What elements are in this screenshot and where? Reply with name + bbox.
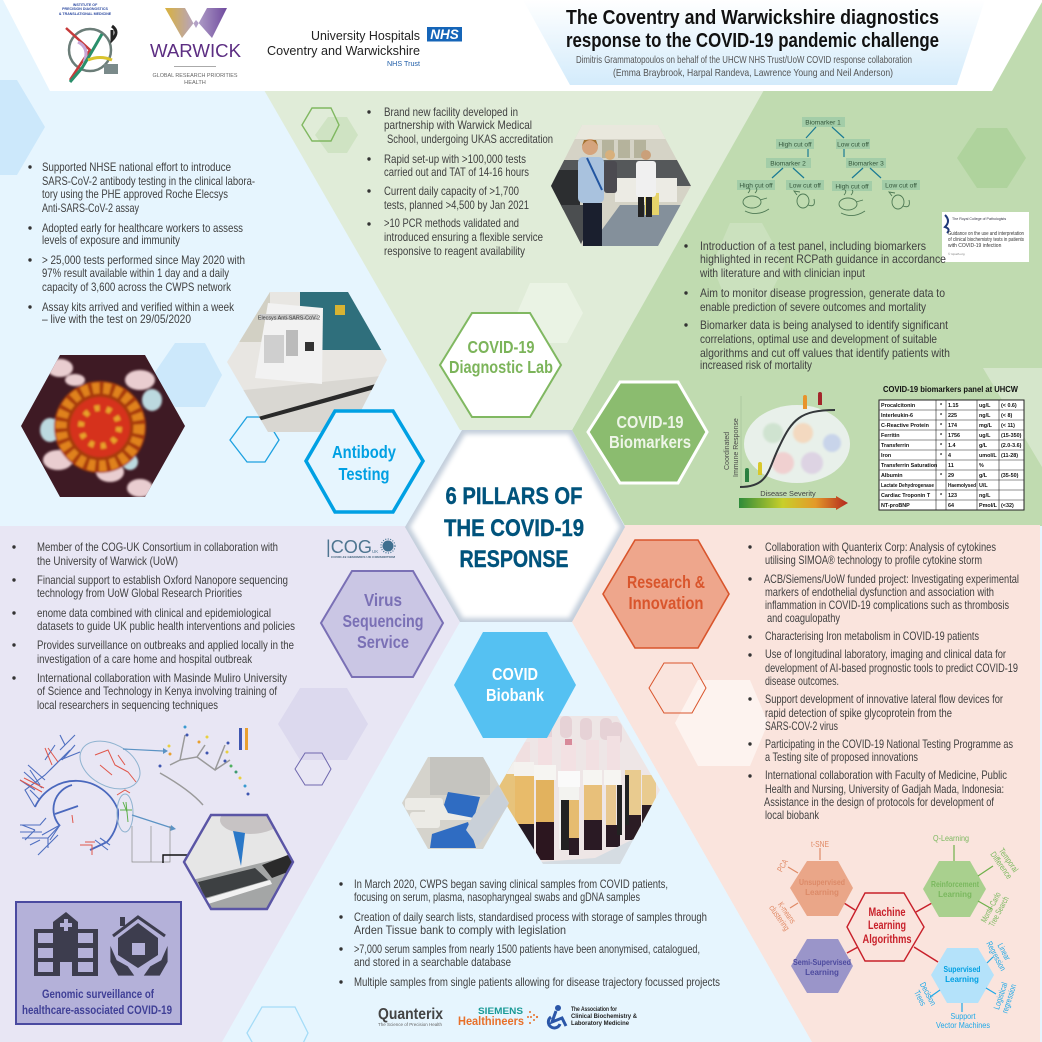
decorative right pale area in biomarkers panel <box>983 368 1042 467</box>
decision tree diagram: High cut off <box>835 184 869 190</box>
table: biomarkers panel: (2.0-3.6) <box>1001 443 1022 449</box>
research bullet text: Characterising Iron metabolism in COVID-19 patients <box>765 629 979 643</box>
research hexagon: Innovation <box>628 593 704 613</box>
logo: association for clinical biochemistry <box>548 1005 637 1028</box>
panel: virus sequencing background <box>0 526 460 1042</box>
center hexagon title: 6 PILLARS OF <box>446 483 582 510</box>
biomarkers bullet text: with literature and with clinician input <box>699 266 866 280</box>
panel: virus sequencing service <box>12 537 443 1024</box>
lab bullet text: partnership with Warwick Medical <box>384 118 532 132</box>
table: biomarkers panel: NT-proBNP <box>881 503 910 509</box>
table: biomarkers panel: Lactate Dehydrogenase <box>881 483 934 489</box>
rcpath guidance card <box>942 212 1029 262</box>
logo: cog-uk: UK <box>372 549 378 554</box>
research bullet text: local biobank <box>765 808 820 822</box>
reinforcement learning: Temporal <box>997 846 1021 874</box>
rcpath guidance card: The Royal College of Pathologists <box>952 217 1006 221</box>
unsupervised learning: Unsupervised <box>799 878 845 887</box>
table: biomarkers panel: 29 <box>948 473 954 479</box>
decision tree diagram: High cut off <box>778 142 812 148</box>
decorative hexagons in biomarkers panel <box>712 128 1026 310</box>
table: biomarkers panel: * <box>940 493 943 499</box>
table: biomarkers panel: (<32) <box>1001 503 1014 509</box>
unsupervised learning: Learning <box>805 888 839 897</box>
table: biomarkers panel: Cardiac Troponin T <box>881 493 931 499</box>
virus sequencing bullet text: local researchers in sequencing techniques <box>37 698 218 712</box>
antibody bullet text: > 25,000 tests performed since May 2020 with <box>42 253 245 267</box>
antibody bullet text: SARS-CoV-2 antibody testing in the clinical labora- <box>42 174 255 188</box>
biomarkers bullet text: Introduction of a test panel, including biomarkers <box>700 239 926 253</box>
decision tree diagram: Low cut off <box>885 182 917 190</box>
biobank bullet text: In March 2020, CWPS began saving clinical samples from COVID patients, <box>354 877 668 891</box>
panel: covid-19 biomarkers <box>588 117 1029 510</box>
rcpath guidance card: of clinical biochemistry tests in patients <box>948 237 1024 243</box>
virus sequencing bullet text: the University of Warwick (UoW) <box>37 554 178 568</box>
reinforcement learning: Reinforcement <box>931 880 979 889</box>
table: biomarkers panel: * <box>940 413 943 419</box>
chart: immune response vs disease severity: Disease Severity <box>760 489 816 498</box>
semi-supervised learning: Semi-Supervised <box>793 958 851 967</box>
semi-supervised learning: Learning <box>805 968 839 977</box>
table: biomarkers panel: % <box>979 463 984 469</box>
decision tree diagram: Biomarker 3 <box>848 160 884 168</box>
table: biomarkers panel: ng/L <box>979 493 991 499</box>
panel: covid-19 biomarkers background <box>572 2 1042 526</box>
virus sequencing bullet text: enome data combined with clinical and epidemiological <box>37 606 271 620</box>
icon: hospital <box>34 912 98 976</box>
antibody bullet text: 97% result available within 1 day and a daily <box>42 266 229 280</box>
antibody bullet text: capacity of 3,600 across the CWPS network <box>42 280 232 294</box>
authors: Dimitris Grammatopoulos on behalf of the UHCW NHS Trust/UoW COVID response collaboration <box>576 54 912 66</box>
authors <box>576 54 912 79</box>
panel: covid-19 diagnostic lab background <box>264 90 764 430</box>
research bullet text: rapid detection of spike glycoprotein from the <box>765 706 952 720</box>
logo: institute: & TRANSLATIONAL MEDICINE <box>59 12 112 16</box>
title box <box>523 0 985 85</box>
table: biomarkers panel: Transferrin Saturation <box>881 463 937 469</box>
biomarkers bullet text: enable prediction of severe outcomes and mortality <box>700 300 926 314</box>
diagnostic lab hexagon: Diagnostic Lab <box>449 357 553 377</box>
authors: (Emma Braybrook, Harpal Randeva, Lawrence Young and Neil Anderson) <box>613 67 893 79</box>
virus sequencing hexagon: Sequencing <box>342 611 424 631</box>
logo: university hospitals coventry and warwickshire nhs <box>267 27 462 68</box>
supervised learning: Decision <box>918 980 939 1007</box>
table: biomarkers panel: 225 <box>948 413 957 419</box>
reinforcement learning <box>923 833 1022 928</box>
mouse icons <box>743 188 909 216</box>
table: biomarkers panel: ug/L <box>979 403 991 409</box>
virus sequencing bullet text <box>12 540 295 712</box>
table: biomarkers panel: 64 <box>948 503 954 509</box>
antibody bullet text: Supported NHSE national effort to introduce <box>42 160 231 174</box>
lab bullet text: >10 PCR methods validated and <box>384 216 519 230</box>
research bullet text: disease outcomes. <box>765 674 839 688</box>
diagnostic lab hexagon <box>440 313 561 417</box>
phylogenetic tree diagram <box>20 726 250 863</box>
header band <box>3 0 1042 91</box>
logo: cog-uk: COVID-19 GENOMICS UK CONSORTIUM <box>331 555 396 559</box>
logo: cog-uk: |COG <box>326 537 372 557</box>
biobank bullet text: Multiple samples from single patients allowing for disease trajectory focussed projects <box>354 975 720 989</box>
decision tree diagram: High cut off <box>739 182 773 190</box>
virus sequencing bullet text: Member of the COG-UK Consortium in collaboration with <box>37 540 278 554</box>
biomarkers bullet text: Aim to monitor disease progression, generate data to <box>700 286 945 300</box>
chart: immune response vs disease severity: Coordinated <box>724 432 731 470</box>
image: coronavirus with antibodies <box>20 355 186 497</box>
chart: immune response vs disease severity <box>724 392 850 510</box>
unsupervised learning: K-means <box>776 900 798 925</box>
reinforcement learning: Tree Search <box>986 894 1011 928</box>
reinforcement learning: Monte-Carlo <box>979 890 1003 924</box>
table: biomarkers panel: 11 <box>948 463 954 469</box>
table: biomarkers panel: (35-50) <box>1001 473 1019 479</box>
biobank bullet text: focusing on serum, plasma, nasopharyngeal swabs and gDNA samples <box>354 890 640 904</box>
table: biomarkers panel: mg/L <box>979 423 993 429</box>
table: biomarkers panel: Pmol/L <box>979 503 998 509</box>
lab bullet text: Brand new facility developed in <box>384 105 518 119</box>
panel: research and innovation <box>603 540 1022 1030</box>
biomarkers hexagon: Biomarkers <box>609 432 691 452</box>
semi-supervised learning <box>791 939 853 993</box>
supervised learning: Supervised <box>944 965 981 974</box>
biomarkers bullet text: algorithms and cut off values that identify patients with <box>700 346 950 360</box>
virus sequencing hexagon <box>321 571 443 677</box>
table: biomarkers panel: Interleukin-6 <box>881 413 913 419</box>
table: biomarkers panel: Albumin <box>881 473 903 479</box>
decorative hexagon outline in antibody panel <box>230 417 279 462</box>
antibody bullet text <box>28 160 255 326</box>
table: biomarkers panel: COVID-19 biomarkers panel at UHCW <box>883 384 1019 394</box>
research hexagon <box>603 540 729 648</box>
reinforcement learning: Difference <box>988 850 1014 881</box>
antibody bullet text: – live with the test on 29/05/2020 <box>42 312 191 326</box>
table: biomarkers panel: g/L <box>979 443 988 449</box>
unsupervised learning: clustering <box>767 903 792 933</box>
logo: warwick <box>150 8 241 86</box>
biomarkers hexagon: COVID-19 <box>616 412 684 432</box>
research hexagon: Research & <box>627 572 705 592</box>
virus sequencing bullet text: International collaboration with Masinde Muliro University <box>37 671 287 685</box>
biobank bullet text: and stored in a searchable database <box>354 955 511 969</box>
decision tree diagram: Low cut off <box>789 182 821 190</box>
title: The Coventry and Warwickshire diagnostics <box>566 7 939 29</box>
biomarkers bullet text <box>684 239 950 372</box>
diagram: machine learning algorithms <box>767 833 1022 1030</box>
reinforcement learning: Q-Learning <box>933 833 969 843</box>
antibody bullet text: levels of exposure and immunity <box>42 233 180 247</box>
panel: research and innovation background <box>572 525 1040 1042</box>
supervised learning: Support <box>950 1011 976 1021</box>
table: biomarkers panel: (< 8) <box>1001 413 1012 419</box>
image: gloved hands in freezer <box>400 755 510 851</box>
table: biomarkers panel: Ferritin <box>881 433 900 439</box>
biobank bullet text <box>339 877 720 989</box>
research bullet text: utilising SIMOA® technology to profile cytokine storm <box>765 553 982 567</box>
decorative hexagon near virus image <box>153 343 222 407</box>
biobank hexagon: Biobank <box>486 685 544 705</box>
antibody bullet text: Adopted early for healthcare workers to assess <box>42 221 243 235</box>
lab bullet text <box>367 105 553 258</box>
logo: warwick: WARWICK <box>150 41 241 61</box>
virus sequencing hexagon: Service <box>357 632 409 652</box>
supervised learning <box>910 935 1018 1030</box>
research bullet text: a Testing site of proposed innovations <box>765 750 918 764</box>
decision tree diagram <box>737 117 920 216</box>
decorative hexagons in lab panel <box>302 108 583 343</box>
table: biomarkers panel: (< 0.6) <box>1001 403 1017 409</box>
biobank hexagon: COVID <box>492 664 538 684</box>
table: biomarkers panel: * <box>940 453 943 459</box>
machine learning hexagon <box>847 893 924 961</box>
logo: association for clinical biochemistry: Clinical Biochemistry & <box>571 1013 637 1020</box>
table: biomarkers panel: 1.15 <box>948 403 958 409</box>
lab bullet text: carried out and TAT of 14-16 hours <box>384 165 529 179</box>
table: biomarkers panel: Transferrin <box>881 443 909 449</box>
biomarkers bullet text: correlations, optimal use and development of suitable <box>700 332 937 346</box>
center hexagon title: THE COVID-19 <box>444 515 584 542</box>
table: biomarkers panel: (11-28) <box>1001 453 1018 459</box>
logo: siemens healthineers: Healthineers <box>458 1014 524 1028</box>
supervised learning: Vector Machines <box>936 1020 990 1030</box>
logo: university hospitals coventry and warwickshire nhs: Coventry and Warwickshire <box>267 43 420 58</box>
machine learning hexagon: Algorithms <box>862 932 912 946</box>
table: biomarkers panel: C-Reactive Protein <box>881 423 929 429</box>
decision tree diagram: Biomarker 2 <box>770 160 806 168</box>
biomarkers bullet text: increased risk of mortality <box>700 358 812 372</box>
virus sequencing bullet text: Financial support to establish Oxford Nanopore sequencing <box>37 573 288 587</box>
supervised learning: regression <box>1000 983 1018 1014</box>
table: biomarkers panel: 123 <box>948 493 957 499</box>
lab bullet text: introduced ensuring a flexible service <box>384 230 543 244</box>
supervised learning: Regression <box>984 939 1008 973</box>
panel: antibody testing <box>20 160 423 512</box>
icon: house in hands <box>110 917 168 976</box>
lab bullet text: School, undergoing UKAS accreditation <box>387 132 553 146</box>
table: biomarkers panel: 1756 <box>948 433 960 439</box>
callout: genomic surveillance: Genomic surveillance of <box>42 987 155 1001</box>
panel: covid biobank <box>339 632 720 1028</box>
virus sequencing bullet text: technology from UoW Global Research Priorities <box>37 586 242 600</box>
virus sequencing bullet text: Provides surveillance on outbreaks and applied locally in the <box>37 638 294 652</box>
logo: university hospitals coventry and warwickshire nhs: NHS <box>430 27 459 42</box>
biomarkers bullet text: Biomarker data is being analysed to identify significant <box>700 318 949 332</box>
unsupervised learning: PCA <box>775 857 790 874</box>
supervised learning: Logistical <box>991 981 1009 1011</box>
unsupervised learning <box>767 839 853 933</box>
table: biomarkers panel: Iron <box>881 453 891 459</box>
logo: quanterix: The Science of Precision Health <box>378 1022 442 1027</box>
chart: immune response vs disease severity: Immune Response <box>733 418 740 477</box>
lab bullet text: Rapid set-up with >100,000 tests <box>384 152 526 166</box>
table: biomarkers panel <box>879 384 1024 510</box>
logo: university hospitals coventry and warwickshire nhs: NHS Trust <box>387 59 421 68</box>
table: biomarkers panel: (< 11) <box>1001 423 1015 429</box>
antibody testing hexagon: Testing <box>338 464 390 484</box>
table: biomarkers panel: * <box>940 473 943 479</box>
lab bullet text: tests, planned >4,500 by Jan 2021 <box>384 198 529 212</box>
table: biomarkers panel: umol/L <box>979 453 997 459</box>
table: biomarkers panel: * <box>940 423 943 429</box>
logo: institute: PRECISION DIAGNOSTICS <box>62 7 108 11</box>
image: elecsys test kit: Elecsys Anti-SARS-CoV-2 <box>258 316 320 322</box>
decision tree diagram: Low cut off <box>837 142 869 148</box>
rcpath guidance card: © rcpath.org <box>948 252 965 256</box>
table: biomarkers panel: (15-350) <box>1001 433 1022 439</box>
decision tree diagram: Biomarker 1 <box>805 120 841 126</box>
image: serum blood tubes <box>495 715 662 865</box>
biobank bullet text: Creation of daily search lists, standardised process with storage of samples through <box>354 910 707 924</box>
decorative hexagon top left <box>0 80 45 175</box>
table: biomarkers panel: 4 <box>948 453 951 459</box>
machine learning hexagon: Machine <box>868 905 906 919</box>
logo: quanterix: Quanterix <box>378 1006 443 1023</box>
logo: association for clinical biochemistry: Laboratory Medicine <box>571 1020 629 1027</box>
table: biomarkers panel: * <box>940 403 943 409</box>
biomarkers hexagon <box>588 382 707 483</box>
logo: institute <box>59 3 118 82</box>
center hexagon title <box>405 430 625 622</box>
table: biomarkers panel: * <box>940 433 943 439</box>
logo: warwick: HEALTH <box>184 80 206 86</box>
biobank hexagon <box>454 632 576 738</box>
image: nanopore sequencing device <box>184 806 294 910</box>
biomarkers bullet text: highlighted in recent RCPath guidance in accordance <box>700 252 946 266</box>
reinforcement learning: Learning <box>938 890 972 899</box>
virus sequencing hexagon: Virus <box>364 590 402 610</box>
image: lab staff photo <box>550 125 692 248</box>
supervised learning: Trees <box>912 989 928 1007</box>
supervised learning: Learning <box>945 975 979 984</box>
logo: siemens healthineers: SIEMENS <box>478 1006 523 1017</box>
antibody bullet text: Assay kits arrived and verified within a week <box>42 300 235 314</box>
supervised learning: Linear <box>996 941 1013 962</box>
antibody bullet text: Anti-SARS-CoV-2 assay <box>42 201 139 215</box>
virus sequencing bullet text: investigation of a care home and hospital outbreak <box>37 652 253 666</box>
logo: cog-uk <box>326 537 396 559</box>
title: response to the COVID-19 pandemic challenge <box>566 30 939 52</box>
table: biomarkers panel: g/L <box>979 473 988 479</box>
table: biomarkers panel: Procalcitonin <box>881 403 915 409</box>
table: biomarkers panel: Haemolysed <box>948 483 976 489</box>
lab bullet text: Current daily capacity of >1,700 <box>384 184 519 198</box>
image: elecsys test kit <box>225 290 390 435</box>
research bullet text: SARS-COV-2 virus <box>765 719 838 733</box>
antibody bullet text: tory using the PHE approved Roche Elecsys <box>42 187 228 201</box>
virus sequencing bullet text: of Science and Technology in Kenya involving training of <box>37 684 278 698</box>
unsupervised learning: t-SNE <box>811 839 829 849</box>
antibody testing hexagon <box>306 411 423 512</box>
biobank bullet text: Arden Tissue bank to comply with legislation <box>354 923 566 937</box>
table: biomarkers panel: 1.4 <box>948 443 956 449</box>
callout: genomic surveillance <box>16 902 181 1024</box>
table: biomarkers panel: ug/L <box>979 433 991 439</box>
decorative hexagons in virus panel <box>247 688 368 1042</box>
table: biomarkers panel: ng/L <box>979 413 991 419</box>
table: biomarkers panel: 174 <box>948 423 957 429</box>
research bullet text <box>748 540 1019 822</box>
research bullet text: and coagulopathy <box>767 611 840 625</box>
panel: covid-19 diagnostic lab <box>367 105 692 417</box>
table: biomarkers panel: * <box>940 443 943 449</box>
logo: siemens healthineers <box>458 1006 538 1028</box>
logo: university hospitals coventry and warwickshire nhs: University Hospitals <box>311 28 420 43</box>
rcpath guidance card: Guidance on the use and interpretation <box>948 231 1024 237</box>
virus sequencing bullet text: datasets to guide UK public health interventions and policies <box>37 619 295 633</box>
machine learning hexagon: Learning <box>868 918 906 932</box>
callout: genomic surveillance: healthcare-associated COVID-19 <box>22 1003 172 1017</box>
logo: warwick: GLOBAL RESEARCH PRIORITIES <box>152 73 238 79</box>
diagnostic lab hexagon: COVID-19 <box>468 337 535 357</box>
logo: institute: INSTITUTE OF <box>73 3 98 7</box>
biobank bullet text: >7,000 serum samples from nearly 1500 patients have been anonymised, catalogued, <box>354 942 700 956</box>
antibody testing hexagon: Antibody <box>332 442 396 462</box>
lab bullet text: responsive to reagent availability <box>384 244 525 258</box>
decorative hexagons in research panel <box>649 663 768 766</box>
center hexagon title: RESPONSE <box>460 546 568 573</box>
logo: association for clinical biochemistry: The Association for <box>571 1006 617 1013</box>
table: biomarkers panel: U/L <box>979 483 988 489</box>
rcpath guidance card: with COVID-19 infection <box>948 243 1002 249</box>
